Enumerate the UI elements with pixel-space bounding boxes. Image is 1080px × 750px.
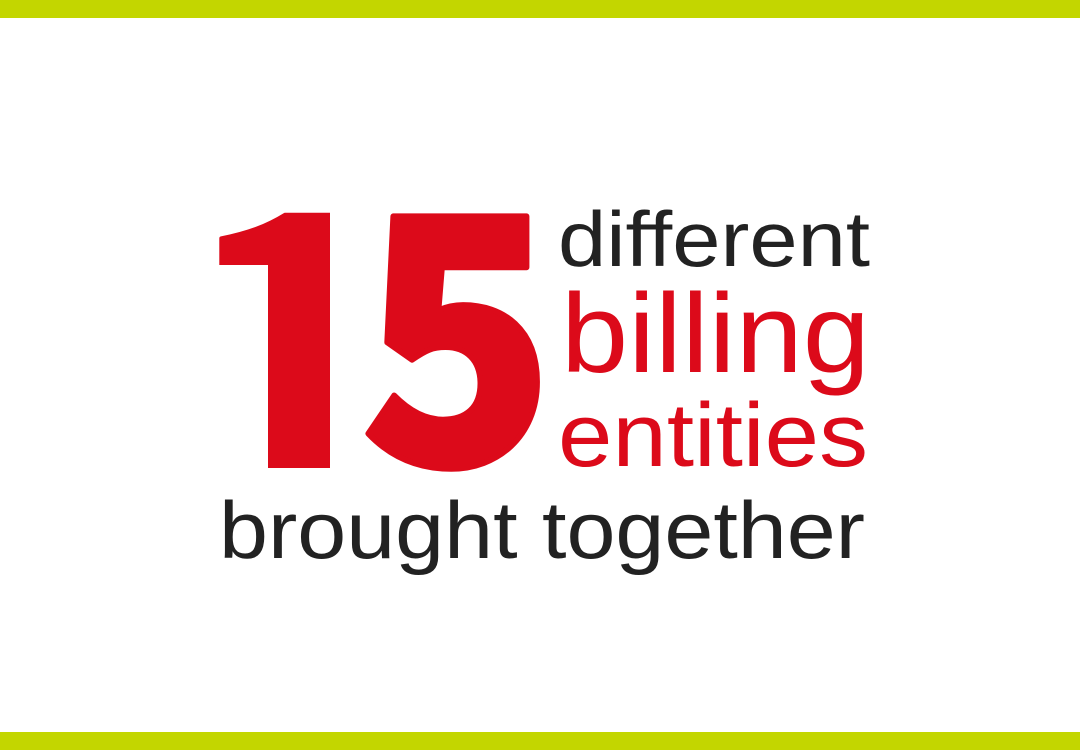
text: billing: billing: [561, 271, 870, 396]
text: entities: entities: [558, 386, 868, 486]
top green bar: [0, 0, 1080, 18]
big number 15: 1: [187, 65, 398, 566]
big number 15: 5: [360, 70, 555, 563]
bottom green bar: [0, 732, 1080, 750]
text: brought together: brought together: [219, 486, 865, 576]
text: different: different: [558, 195, 870, 283]
big number 15: [219, 212, 540, 472]
